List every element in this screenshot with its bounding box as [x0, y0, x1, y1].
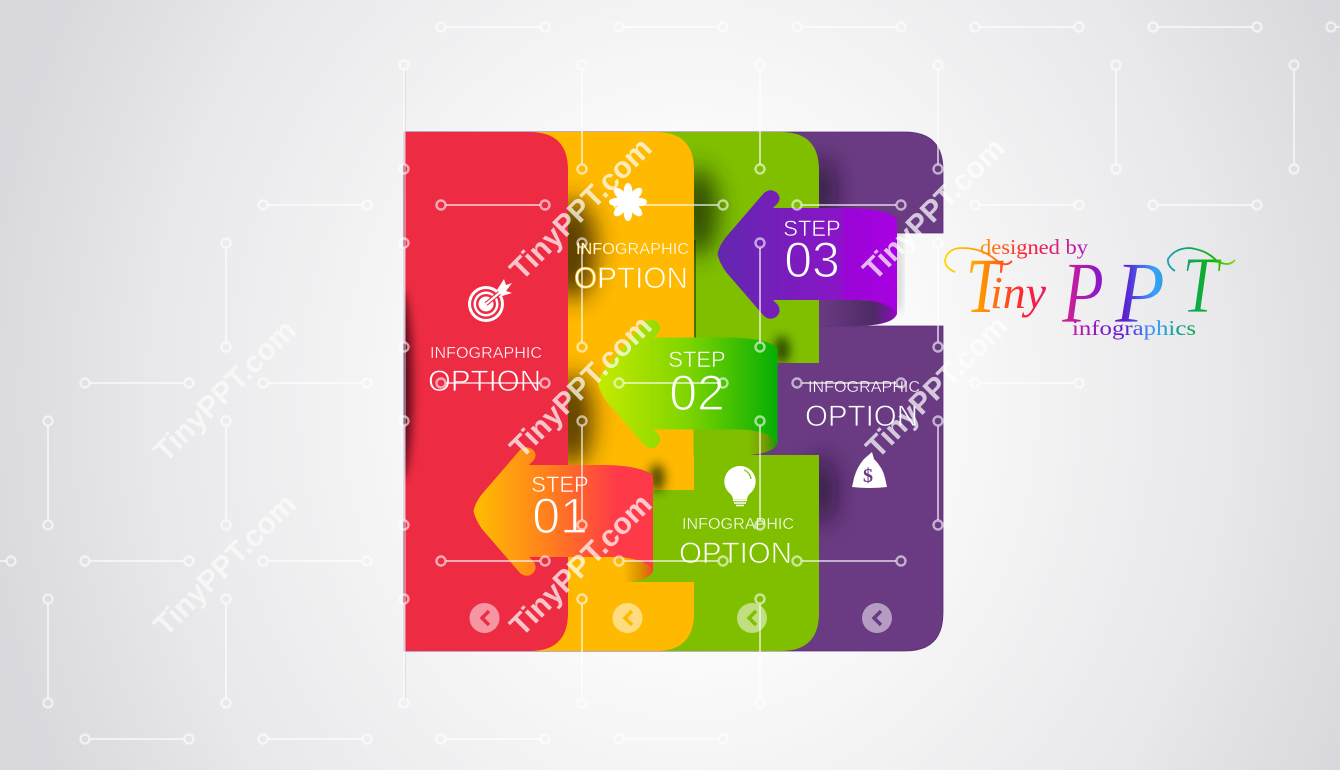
text: step 03: 03 [784, 232, 840, 288]
watermark: TinyPPT.com repeated: TinyPPT.com [857, 132, 1012, 287]
icon: money bag: $ [863, 465, 873, 487]
text: purple option: OPTION [805, 400, 918, 433]
text: purple option [805, 379, 920, 433]
ribbon arrow: step 03 [718, 190, 897, 326]
logo: designed by TinyPPT infographics: T [1182, 242, 1222, 330]
watermark: TinyPPT.com repeated: TinyPPT.com [148, 314, 303, 469]
back button: red [470, 603, 500, 633]
watermark: TinyPPT.com repeated: TinyPPT.com [504, 310, 659, 465]
text: step 01: 01 [532, 488, 588, 544]
text: yellow option: INFOGRAPHIC [576, 241, 689, 258]
text: green option: OPTION [679, 537, 792, 570]
text: yellow option: OPTION [574, 262, 688, 295]
text: step 02: STEP [668, 347, 726, 372]
watermark: TinyPPT.com repeated [148, 132, 1015, 643]
watermark: TinyPPT.com repeated: TinyPPT.com [504, 488, 659, 643]
logo: designed by TinyPPT infographics: T [966, 242, 1004, 329]
shadow: panel left edge [404, 70, 406, 700]
icon: flower [609, 183, 647, 221]
text: step 01: STEP [531, 472, 589, 497]
ribbon arrow: step 02 [598, 320, 778, 456]
text: green option: INFOGRAPHIC [682, 516, 794, 533]
text: purple option: INFOGRAPHIC [808, 379, 920, 396]
text: red option [428, 345, 542, 398]
panel: green column [630, 132, 819, 651]
text: yellow option [574, 241, 689, 295]
logo: designed by TinyPPT infographics: iny [990, 267, 1047, 318]
text: step 02: 02 [669, 365, 725, 421]
icon: target with arrow [468, 279, 512, 322]
panel: red column [388, 132, 568, 651]
icon: money bag [852, 452, 887, 488]
shadow: step 01 ribbon end [649, 464, 665, 492]
text: red option: INFOGRAPHIC [430, 345, 542, 362]
logo: designed by TinyPPT infographics: designed by [980, 235, 1089, 259]
back button: green [737, 603, 767, 633]
back button: yellow [612, 603, 642, 633]
icon: light bulb [724, 466, 756, 506]
logo: designed by TinyPPT infographics: P [1114, 245, 1165, 342]
ribbon arrow: step 01 [474, 447, 653, 583]
watermark: TinyPPT.com repeated: TinyPPT.com [860, 310, 1015, 465]
text: step 03: STEP [783, 216, 841, 241]
logo: designed by TinyPPT infographics: infographics [1072, 316, 1196, 340]
text: red option: OPTION [428, 365, 541, 398]
back button: purple [862, 603, 892, 633]
shadow: step 03 ribbon on background [894, 225, 900, 310]
watermark: TinyPPT.com repeated: TinyPPT.com [504, 132, 659, 287]
logo: designed by TinyPPT infographics: P [1061, 245, 1104, 342]
panel: yellow column [531, 132, 694, 651]
watermark: TinyPPT.com repeated: TinyPPT.com [148, 488, 303, 643]
text: green option [679, 516, 794, 570]
logo: designed by TinyPPT infographics [945, 235, 1235, 342]
panel: purple column [404, 132, 943, 651]
